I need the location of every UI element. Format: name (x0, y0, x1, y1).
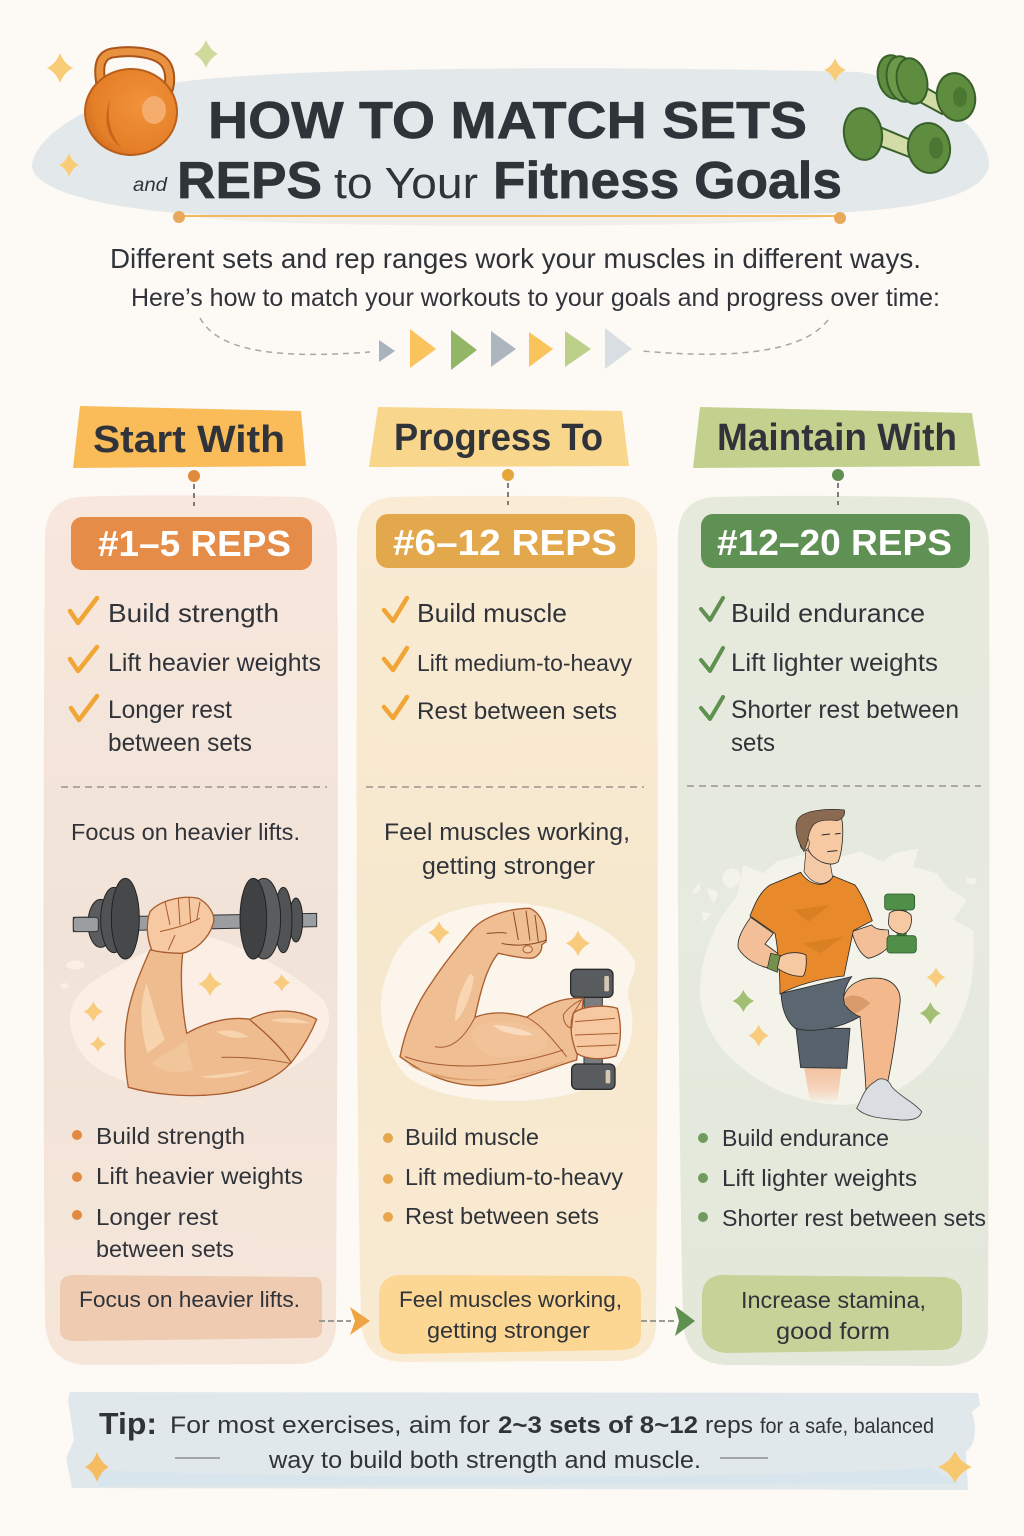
illustration: flexed arm with dumbbell (381, 903, 635, 1101)
title banner (32, 68, 989, 226)
checklist: start with: Longer rest (108, 696, 232, 724)
rep pill: 6-12 reps (376, 514, 635, 568)
bullets: maintain with: Shorter rest between sets (722, 1205, 986, 1231)
sparkle decorations top (47, 40, 846, 177)
standing leg (804, 1067, 842, 1102)
arm (125, 950, 317, 1096)
neck (804, 850, 833, 883)
checklist: maintain with: sets (731, 729, 775, 757)
bullets: maintain with: Lift lighter weights (722, 1165, 917, 1191)
callout: increase stamina: Increase stamina, (741, 1287, 926, 1313)
bullets: start with: Build strength (96, 1123, 245, 1149)
caption: feel muscles working: getting stronger (422, 853, 595, 880)
connector: maintain with (832, 469, 844, 505)
tip label: Tip: (99, 1406, 157, 1441)
tip text line one: reps (705, 1412, 753, 1439)
tip text line two: way to build both strength and muscle. (268, 1447, 701, 1474)
checklist: maintain with (701, 598, 959, 757)
bullets: start with: Lift heavier weights (96, 1163, 303, 1189)
tip text line one: For most exercises, aim for (170, 1412, 490, 1439)
rep pill: 1-5 reps: #1–5 REPS (98, 523, 291, 564)
checklist: start with: Build strength (108, 598, 279, 628)
shoe (857, 1079, 922, 1120)
callout: feel muscles working: Feel muscles working, (399, 1287, 622, 1312)
green dumbbell (897, 907, 907, 938)
bar (73, 913, 317, 932)
caption: focus on heavier lifts: Focus on heavier lifts. (71, 819, 300, 845)
tip text line one (170, 1412, 934, 1439)
arm (400, 908, 583, 1086)
panel: maintain with (678, 407, 989, 1366)
tip sparkles (85, 1451, 972, 1483)
checklist: start with (70, 598, 321, 757)
callout: focus on heavier lifts: Focus on heavier lifts. (79, 1287, 300, 1312)
intro line two: Here’s how to match your workouts to your goals and progress over time: (131, 284, 940, 312)
rep pill: 1-5 reps (71, 517, 312, 570)
bullets: start with: Longer rest (96, 1204, 219, 1230)
checklist: progress to: Rest between sets (417, 698, 617, 725)
fist (777, 953, 806, 976)
heading ribbon: progress to: Progress To (394, 417, 603, 459)
tip text line one: for a safe, balanced (760, 1415, 934, 1438)
bullets: progress to: Rest between sets (405, 1203, 599, 1229)
shorts top (781, 977, 860, 1030)
right arm (852, 925, 890, 958)
panel: start with (44, 406, 338, 1365)
checklist: start with: Lift heavier weights (108, 649, 321, 677)
checklist: maintain with: Lift lighter weights (731, 649, 938, 677)
bullets: maintain with: Build endurance (722, 1125, 889, 1151)
heading ribbon: maintain with (693, 407, 980, 468)
illustration: man stepping with dumbbell (692, 809, 977, 1120)
intro line one: Different sets and rep ranges work your muscles in different ways. (110, 243, 921, 274)
tip strokes (175, 1457, 768, 1459)
shirt (750, 872, 872, 994)
progress arrows row (200, 318, 828, 370)
bullets: progress to: Build muscle (405, 1124, 539, 1150)
tip text line one: 2~3 sets of 8~12 (498, 1412, 698, 1439)
wristband (767, 953, 782, 972)
title word and: and (133, 175, 169, 196)
icon: kettlebell (85, 52, 177, 155)
heading ribbon: progress to (369, 407, 629, 467)
callout: increase stamina (702, 1275, 962, 1353)
arrow: progress to maintain (641, 1306, 695, 1336)
rep pill: 6-12 reps: #6–12 REPS (393, 522, 617, 563)
caption: feel muscles working (384, 819, 630, 880)
hand (147, 897, 214, 953)
gripping hand (571, 1006, 620, 1059)
connector: start with (188, 470, 200, 506)
checklist: start with: between sets (108, 729, 252, 757)
bullets: start with: between sets (96, 1236, 234, 1262)
rep pill: 12-20 reps (701, 514, 970, 568)
head (806, 818, 843, 864)
title underline (173, 211, 846, 224)
tip banner (66, 1392, 980, 1490)
title line one: HOW TO MATCH SETS (208, 92, 807, 150)
callout: feel muscles working: getting stronger (427, 1318, 591, 1343)
left arm (738, 917, 780, 968)
bullets: progress to (383, 1124, 624, 1229)
caption: feel muscles working: Feel muscles working, (384, 819, 630, 846)
bullets: start with (72, 1123, 303, 1262)
title words to your: to Your (334, 159, 478, 208)
bullets: progress to: Lift medium-to-heavy (405, 1164, 624, 1190)
checklist: maintain with: Shorter rest between (731, 696, 959, 724)
heading ribbon: start with: Start With (93, 419, 285, 461)
heading ribbon: start with (73, 406, 306, 468)
callout: feel muscles working (379, 1275, 641, 1354)
panel: progress to (356, 407, 658, 1362)
icon: green dumbbells (841, 52, 980, 176)
bullets: maintain with (698, 1125, 986, 1231)
callout: focus on heavier lifts (60, 1275, 322, 1341)
title word reps: REPS (177, 152, 322, 210)
raised leg (843, 978, 900, 1092)
checklist: progress to (384, 598, 632, 725)
title words fitness goals: Fitness Goals (493, 152, 842, 210)
checklist: progress to: Lift medium-to-heavy (417, 650, 632, 676)
callout: increase stamina: good form (776, 1318, 890, 1344)
rep pill: 12-20 reps: #12–20 REPS (717, 522, 952, 563)
checklist: progress to: Build muscle (417, 598, 567, 628)
heading ribbon: maintain with: Maintain With (717, 417, 957, 459)
connector: progress to (502, 469, 514, 505)
arrow: start to progress (319, 1307, 370, 1335)
fist (487, 911, 547, 945)
dumbbell (584, 995, 602, 1008)
hair (796, 809, 845, 852)
illustration: arm lifting barbell (60, 878, 329, 1096)
checklist: maintain with: Build endurance (731, 598, 925, 628)
